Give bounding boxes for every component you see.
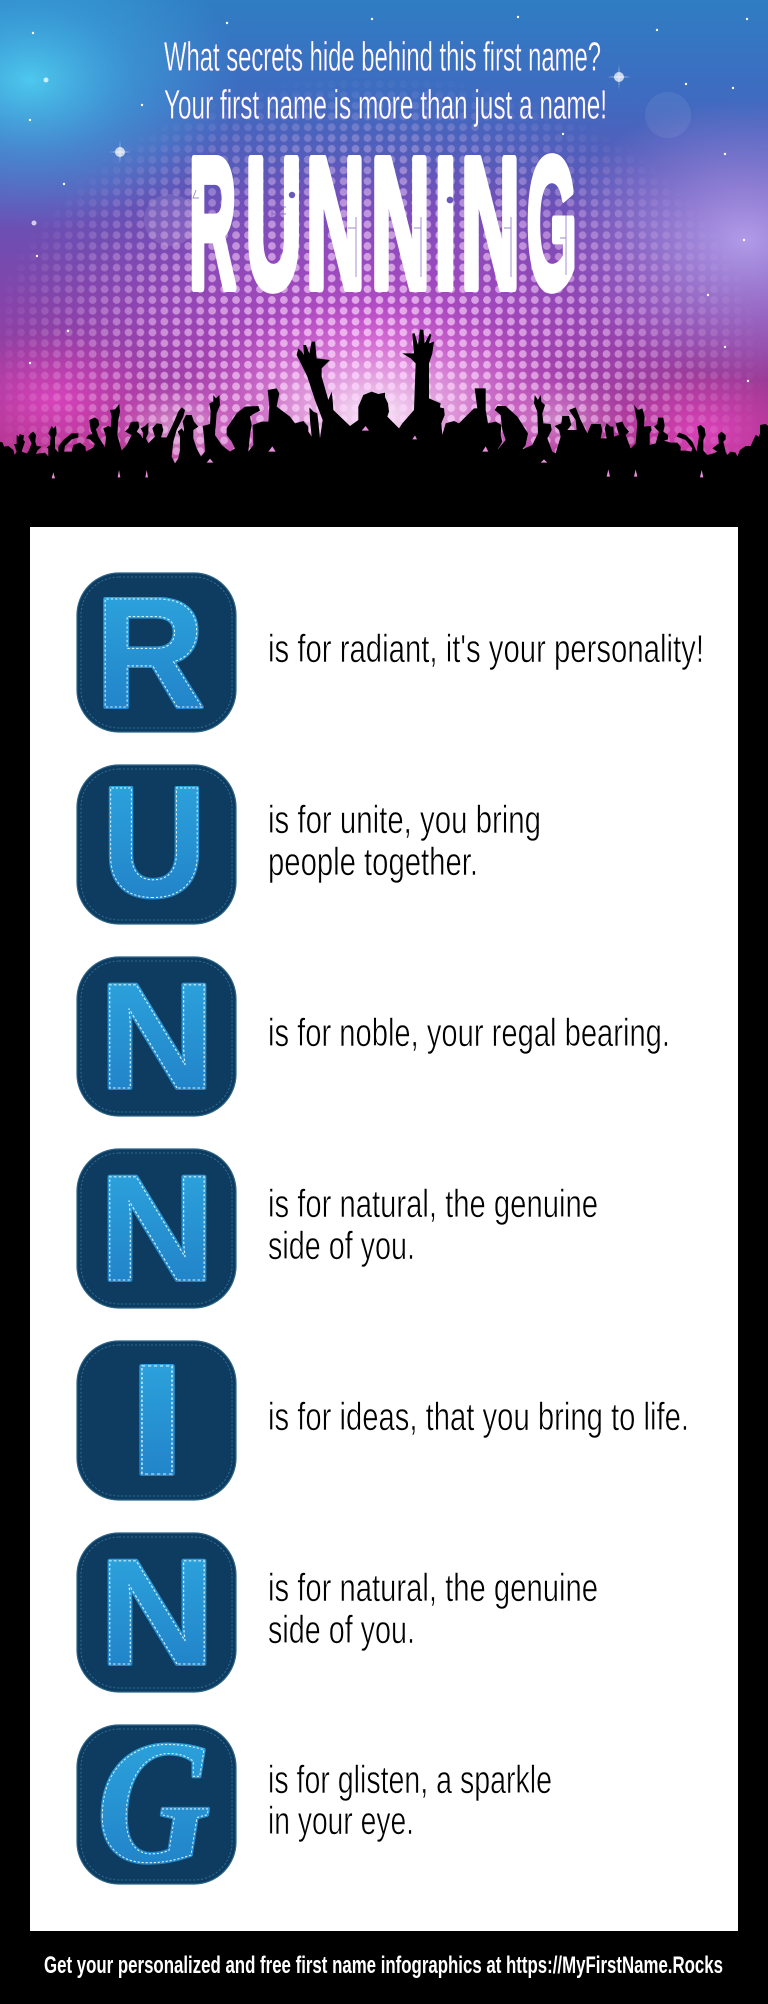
- row: N third: [77, 1528, 598, 1696]
- row: G: [77, 1705, 552, 1900]
- icon: letter N: N: [99, 1144, 215, 1312]
- title: RUNNING: [189, 120, 577, 328]
- crowd gaps: [412, 435, 703, 477]
- row: U: [77, 755, 541, 930]
- crowd silhouette: [0, 329, 768, 528]
- crowd gaps: [52, 426, 369, 478]
- icon: letter G: G: [97, 1705, 210, 1900]
- crowd: right half: [383, 329, 768, 500]
- text: U lines: [268, 799, 541, 884]
- row: R: [77, 566, 704, 741]
- icon: letter I: I: [128, 1333, 186, 1508]
- icon: letter U: U: [102, 755, 206, 930]
- row: N: [77, 952, 670, 1120]
- text: natural lines: [268, 1183, 598, 1268]
- icon: letter I: I: [128, 1333, 186, 1508]
- icon: letter N: [77, 1144, 236, 1312]
- title: RUNNING: N: [306, 120, 365, 328]
- icon: letter N: N: [99, 1528, 215, 1696]
- title: RUNNING: N: [461, 120, 520, 328]
- header concert scene: [0, 0, 768, 464]
- title: RUNNING: I: [434, 120, 457, 328]
- icon: letter N: N: [99, 1528, 215, 1696]
- text: G lines: [268, 1759, 552, 1843]
- text: G: [527, 120, 577, 328]
- icon: letter I: [77, 1333, 236, 1508]
- icon: letter G: G: [97, 1705, 210, 1900]
- icon: letter R: R: [95, 566, 205, 741]
- row: N second: [77, 1144, 598, 1312]
- text: natural lines: [268, 1567, 598, 1652]
- crowd: left half: [0, 342, 385, 500]
- icon: letter U: U: [102, 755, 206, 930]
- icon: letter N: N: [99, 952, 215, 1120]
- icon: letter N: [77, 1528, 236, 1696]
- text: natural lines: side of you.: [268, 1609, 415, 1652]
- row: I: [77, 1333, 689, 1508]
- panel: white content card: [30, 527, 738, 1931]
- icon: letter R: R: [95, 566, 205, 741]
- text: U lines: is for unite, you bring: [268, 799, 541, 842]
- text: G lines: in your eye.: [268, 1800, 414, 1843]
- title: RUNNING: N: [371, 120, 430, 328]
- icon: letter N: N: [99, 1144, 215, 1312]
- intro heading: [164, 34, 607, 128]
- distress marks on title: [193, 190, 566, 277]
- icon: letter N: N: [99, 952, 215, 1120]
- title: RUNNING: R: [189, 120, 236, 328]
- sparkles: [29, 16, 749, 382]
- text: natural lines: side of you.: [268, 1225, 415, 1268]
- text: U lines: people together.: [268, 841, 478, 884]
- icon: letter N: [77, 952, 236, 1120]
- text: natural lines: is for natural, the genuine: [268, 1567, 598, 1610]
- title: RUNNING: U: [246, 120, 302, 328]
- text: G lines: is for glisten, a sparkle: [268, 1759, 552, 1802]
- text: natural lines: is for natural, the genuine: [268, 1183, 598, 1226]
